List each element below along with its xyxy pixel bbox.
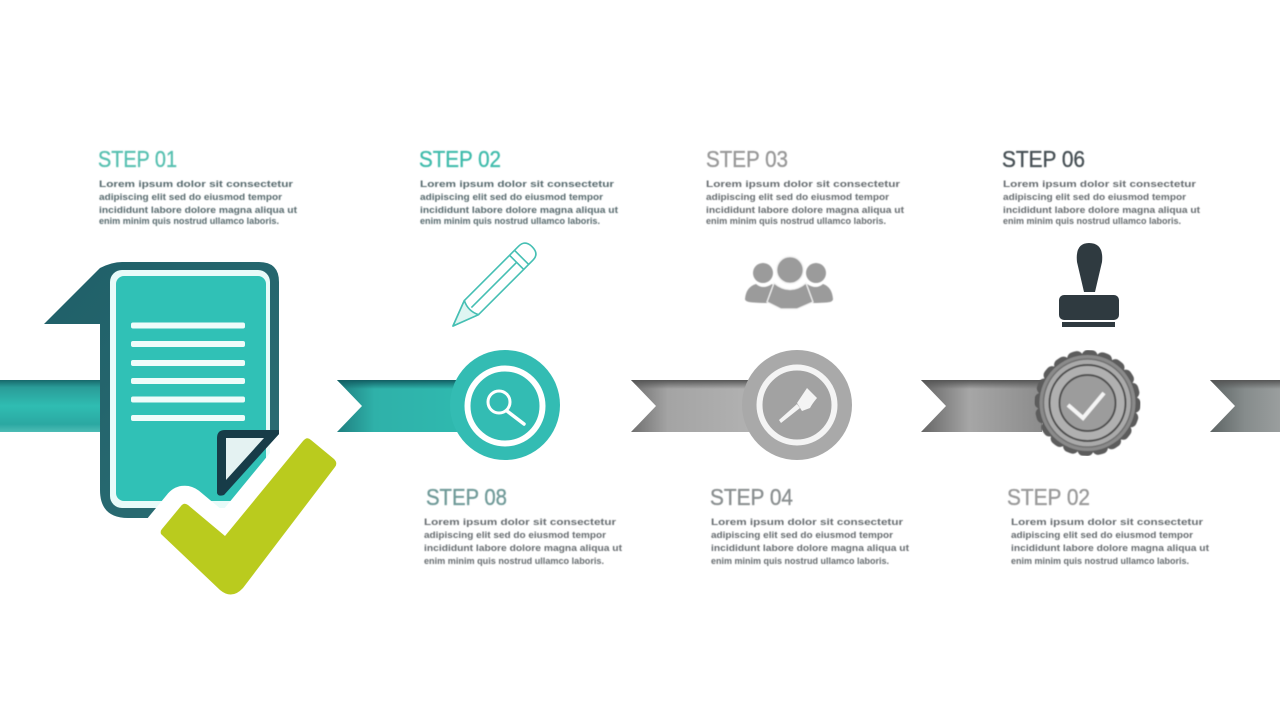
document back xyxy=(44,262,279,518)
body xyxy=(706,179,904,226)
body: adipiscing elit sed do eiusmod tempor xyxy=(424,530,607,540)
step 02 text xyxy=(419,146,618,226)
body: incididunt labore dolore magna aliqua ut xyxy=(1003,205,1200,215)
check mark xyxy=(161,438,336,595)
heading: STEP 08 xyxy=(426,484,507,510)
document page xyxy=(110,270,270,508)
body: enim minim quis nostrud ullamco laboris. xyxy=(1003,216,1181,226)
body xyxy=(1011,517,1209,566)
icon: seal check xyxy=(1068,393,1104,418)
body xyxy=(420,179,618,226)
badge: magnifier xyxy=(450,350,560,460)
icon: pencil xyxy=(446,240,539,333)
body xyxy=(711,517,909,566)
body: Lorem ipsum dolor sit consectetur xyxy=(706,179,901,189)
heading: STEP 03 xyxy=(706,146,788,172)
body: Lorem ipsum dolor sit consectetur xyxy=(420,179,615,189)
body: Lorem ipsum dolor sit consectetur xyxy=(1011,517,1204,527)
body: enim minim quis nostrud ullamco laboris. xyxy=(706,216,886,226)
heading: STEP 06 xyxy=(1002,146,1085,172)
heading: STEP 04 xyxy=(710,484,793,510)
body xyxy=(424,517,622,566)
icon: people xyxy=(745,256,833,309)
body: Lorem ipsum dolor sit consectetur xyxy=(424,517,617,527)
step 08 text xyxy=(424,484,622,566)
document lines xyxy=(131,322,245,421)
check mark halo xyxy=(161,438,336,595)
ribbon 4 xyxy=(921,380,1042,432)
icon: document with check xyxy=(44,262,336,595)
body: incididunt labore dolore magna aliqua ut xyxy=(711,543,909,553)
step 02 lower text xyxy=(1007,484,1209,566)
body: adipiscing elit sed do eiusmod tempor xyxy=(711,530,894,540)
body: incididunt labore dolore magna aliqua ut xyxy=(706,205,904,215)
body: incididunt labore dolore magna aliqua ut xyxy=(1011,543,1209,553)
body: adipiscing elit sed do eiusmod tempor xyxy=(1011,530,1194,540)
body: enim minim quis nostrud ullamco laboris. xyxy=(99,216,279,226)
ribbon 5 xyxy=(1210,380,1280,432)
step 03 text xyxy=(706,146,904,226)
icon: magnifier xyxy=(488,391,524,424)
body: adipiscing elit sed do eiusmod tempor xyxy=(1003,192,1187,202)
body: Lorem ipsum dolor sit consectetur xyxy=(711,517,904,527)
body: enim minim quis nostrud ullamco laboris. xyxy=(1011,556,1189,566)
body: adipiscing elit sed do eiusmod tempor xyxy=(99,192,283,202)
body xyxy=(1003,179,1200,226)
step 06 text xyxy=(1002,146,1200,226)
ribbon 1 xyxy=(0,380,102,432)
badge: tool xyxy=(742,350,852,460)
body: Lorem ipsum dolor sit consectetur xyxy=(1003,179,1197,189)
heading: STEP 02 xyxy=(1007,484,1090,510)
body: Lorem ipsum dolor sit consectetur xyxy=(99,179,294,189)
page fold xyxy=(217,430,279,496)
heading: STEP 02 xyxy=(419,146,501,172)
badge: seal xyxy=(1040,355,1136,451)
body: enim minim quis nostrud ullamco laboris. xyxy=(711,556,889,566)
ribbon 3 xyxy=(631,380,754,432)
body: adipiscing elit sed do eiusmod tempor xyxy=(420,192,604,202)
body: enim minim quis nostrud ullamco laboris. xyxy=(424,556,604,566)
body: incididunt labore dolore magna aliqua ut xyxy=(420,205,618,215)
body: enim minim quis nostrud ullamco laboris. xyxy=(420,216,600,226)
body: adipiscing elit sed do eiusmod tempor xyxy=(706,192,890,202)
ribbon 2 xyxy=(337,380,462,432)
icon: stamp xyxy=(1059,243,1119,327)
heading: STEP 01 xyxy=(98,146,177,172)
body: incididunt labore dolore magna aliqua ut xyxy=(99,205,297,215)
step 01 text xyxy=(98,146,297,226)
body: incididunt labore dolore magna aliqua ut xyxy=(424,543,622,553)
step 04 text xyxy=(710,484,909,566)
body xyxy=(99,179,297,226)
icon: tool xyxy=(779,388,817,423)
